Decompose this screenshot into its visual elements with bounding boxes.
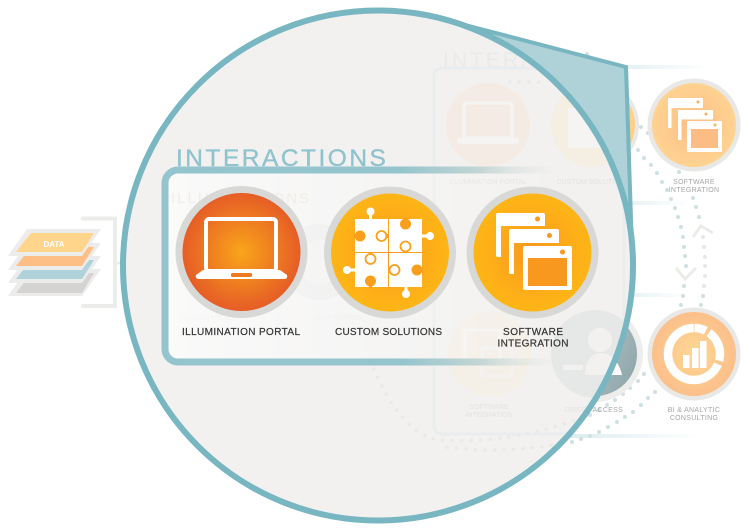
infographic: INTEGRATION (498, 338, 568, 350)
bracket (83, 218, 115, 306)
data label: DATA (43, 240, 65, 249)
faded background diagram: CONSULTING (670, 415, 718, 422)
faint content seen through the lens: DIRECT ACCESS (565, 407, 621, 414)
faint content seen through the lens: INTEGRATION (465, 412, 513, 419)
icon: windows (496, 213, 572, 290)
icon: laptop (196, 219, 287, 279)
data layers stack (8, 229, 101, 296)
callout wedge (378, 20, 632, 265)
dotted connectors (570, 52, 705, 444)
right software integration label: SOFTWARE (673, 179, 715, 186)
chevron up (693, 226, 713, 237)
icon: puzzle (343, 208, 434, 298)
label: software integration: SOFTWARE (503, 327, 563, 338)
magnifier circle (123, 10, 639, 520)
node: custom solutions (324, 186, 456, 318)
faint direct access circle (547, 306, 643, 402)
faint custom solutions circle (547, 79, 639, 171)
connector arrow from data (115, 262, 128, 264)
faded background diagram: INTEGRATION (669, 187, 719, 194)
interactions panel (165, 170, 560, 362)
right software integration node (648, 78, 740, 172)
faint band lines (570, 65, 710, 438)
faint content seen through the lens: DESTINATION (316, 315, 362, 322)
faint illuminations heading: ILLUMINATIONS (171, 190, 311, 207)
chevron down (676, 268, 696, 279)
faint content seen through the lens: SOFTWARE (469, 404, 509, 411)
BI label: BI & ANALYTIC (668, 407, 720, 414)
faint content seen through the lens: ILLUMINATION (182, 315, 230, 322)
faint content seen through the lens: INTERACTIONS (443, 49, 635, 72)
heading: interactions: INTERACTIONS (176, 145, 388, 172)
faint content seen through the lens: CUSTOM SOLUTIONS (557, 179, 630, 186)
node: illumination portal (176, 186, 308, 318)
node: software integration (466, 186, 598, 318)
BI and analytic consulting node (648, 308, 740, 400)
direct access label: DIRECT ACCESS (563, 407, 623, 414)
faint content seen through the lens (372, 52, 626, 452)
label: illumination portal: ILLUMINATION PORTAL (182, 327, 300, 338)
faded background diagram (547, 52, 740, 444)
faint content seen through the lens: ILLUMINATION PORTAL (449, 179, 527, 186)
label: custom solutions: CUSTOM SOLUTIONS (335, 327, 442, 338)
